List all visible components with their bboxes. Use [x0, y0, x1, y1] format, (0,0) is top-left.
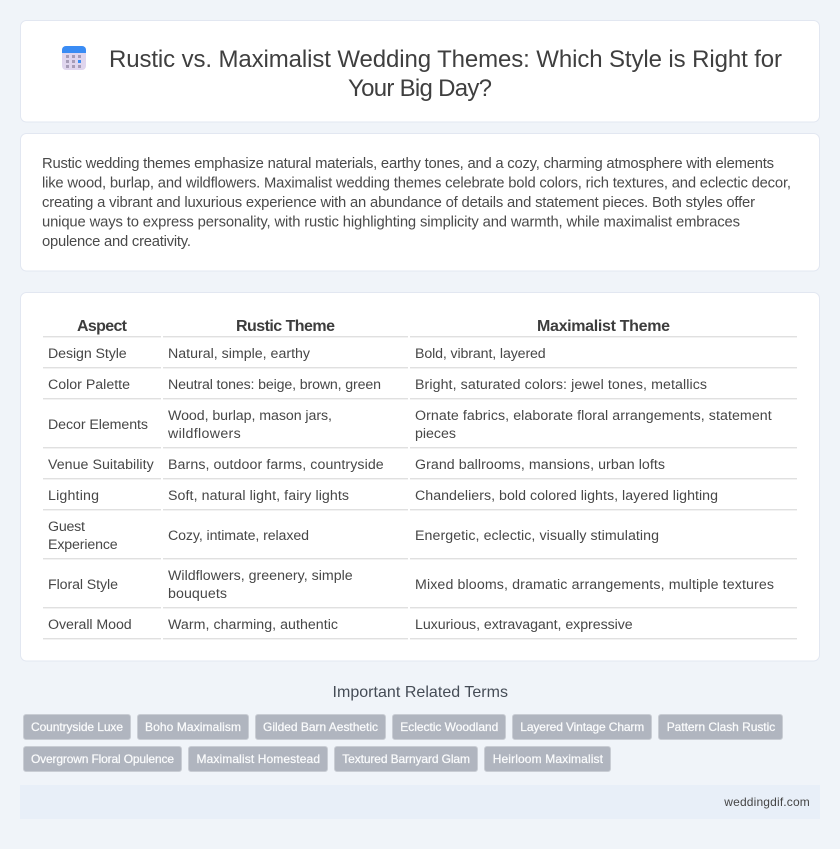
tag: boho maximalism	[138, 714, 248, 740]
row: floral style: Floral Style	[48, 577, 118, 593]
footer	[20, 785, 820, 819]
row: lighting: Chandeliers, bold colored lights, layered lighting	[415, 488, 718, 504]
tag: maximalist homestead	[188, 746, 328, 772]
tag: heirloom maximalist	[484, 746, 610, 772]
tag: heirloom maximalist: Heirloom Maximalist	[493, 752, 604, 766]
panel: header	[20, 20, 820, 122]
panel: introduction text: like wood, burlap, and wildflowers. Maximalist wedding themes celebrate bold colors, rich textures, and eclectic decor,	[42, 176, 791, 192]
row: decor elements: Decor Elements	[48, 417, 148, 433]
title: Your Big Day?	[348, 75, 492, 102]
panel: comparison table	[20, 292, 820, 661]
tag: gilded barn aesthetic	[256, 714, 386, 740]
tag: eclectic woodland	[392, 714, 506, 740]
row: decor elements	[48, 408, 772, 442]
tag: layered vintage charm: Layered Vintage Charm	[520, 720, 644, 734]
tag: textured barnyard glam	[334, 746, 478, 772]
row: guest experience: Cozy, intimate, relaxed	[168, 528, 309, 544]
tag: overgrown floral opulence: Overgrown Floral Opulence	[31, 752, 174, 766]
row: design style	[48, 346, 546, 362]
tag: gilded barn aesthetic: Gilded Barn Aesthetic	[263, 720, 378, 734]
tag: textured barnyard glam: Textured Barnyard Glam	[342, 752, 470, 766]
row: venue suitability: Venue Suitability	[48, 457, 155, 473]
panel: introduction text: opulence and creativity.	[42, 234, 191, 250]
row: design style: Design Style	[48, 346, 127, 362]
table header row: Rustic Theme	[236, 318, 335, 335]
row: floral style	[48, 568, 774, 602]
title: Rustic vs. Maximalist Wedding Themes: Which Style is Right for	[109, 46, 782, 73]
icon: calendar	[62, 46, 86, 70]
tag: pattern clash rustic	[658, 714, 782, 740]
table header row	[77, 318, 670, 335]
row: lighting	[48, 488, 718, 504]
row: guest experience: Energetic, eclectic, visually stimulating	[415, 528, 659, 544]
tag: boho maximalism: Boho Maximalism	[145, 720, 241, 734]
row: guest experience	[48, 519, 659, 553]
table header row: Aspect	[77, 318, 128, 335]
row: lighting: Soft, natural light, fairy lights	[168, 488, 349, 504]
row: decor elements: Ornate fabrics, elaborate floral arrangements, statement	[415, 408, 772, 424]
row: overall mood: Warm, charming, authentic	[168, 617, 338, 633]
row: lighting: Lighting	[48, 488, 99, 504]
row: decor elements: wildflowers	[167, 426, 241, 442]
row: floral style: Wildflowers, greenery, simple	[168, 568, 353, 584]
tag: layered vintage charm	[512, 714, 652, 740]
tag: maximalist homestead: Maximalist Homestead	[196, 752, 320, 766]
row: overall mood	[48, 617, 633, 633]
tag: countryside luxe	[24, 714, 130, 740]
row: color palette: Color Palette	[48, 377, 130, 393]
panel: introduction text: creating a vibrant and luxurious experience with an abundance of details and statement pieces. Both styles offer	[42, 195, 755, 211]
row: color palette: Bright, saturated colors: jewel tones, metallics	[415, 377, 707, 393]
tag list	[24, 714, 782, 772]
panel: introduction text: Rustic wedding themes emphasize natural materials, earthy tones, and a cozy, charming atmosphere with elements	[42, 156, 774, 172]
row: design style: Bold, vibrant, layered	[415, 346, 546, 362]
row: color palette: Neutral tones: beige, brown, green	[168, 377, 381, 393]
panel: introduction text: unique ways to express personality, with rustic highlighting simplicity and warmth, while maximalist embraces	[42, 214, 740, 230]
heading: important related terms: Important Related Terms	[332, 684, 508, 701]
title	[109, 46, 782, 102]
tag: countryside luxe: Countryside Luxe	[31, 720, 123, 734]
row: guest experience: Guest	[48, 519, 85, 535]
row: floral style: Mixed blooms, dramatic arrangements, multiple textures	[415, 577, 774, 593]
panel: introduction text	[20, 134, 820, 271]
table header row: Maximalist Theme	[537, 318, 670, 335]
row: overall mood: Luxurious, extravagant, expressive	[415, 617, 633, 633]
tag: overgrown floral opulence	[24, 746, 182, 772]
row: venue suitability: Barns, outdoor farms, countryside	[168, 457, 384, 473]
row: floral style: bouquets	[168, 586, 227, 602]
row: decor elements: pieces	[415, 426, 456, 442]
row: guest experience: Experience	[48, 537, 118, 553]
row: design style: Natural, simple, earthy	[168, 346, 311, 362]
row: venue suitability	[48, 457, 665, 473]
row: color palette	[48, 377, 707, 393]
row: overall mood: Overall Mood	[48, 617, 132, 633]
footer: weddingdif.com	[723, 795, 810, 809]
row: decor elements: Wood, burlap, mason jars,	[168, 408, 332, 424]
tag: pattern clash rustic: Pattern Clash Rustic	[667, 720, 775, 734]
row: venue suitability: Grand ballrooms, mansions, urban lofts	[415, 457, 665, 473]
tag: eclectic woodland: Eclectic Woodland	[400, 720, 498, 734]
